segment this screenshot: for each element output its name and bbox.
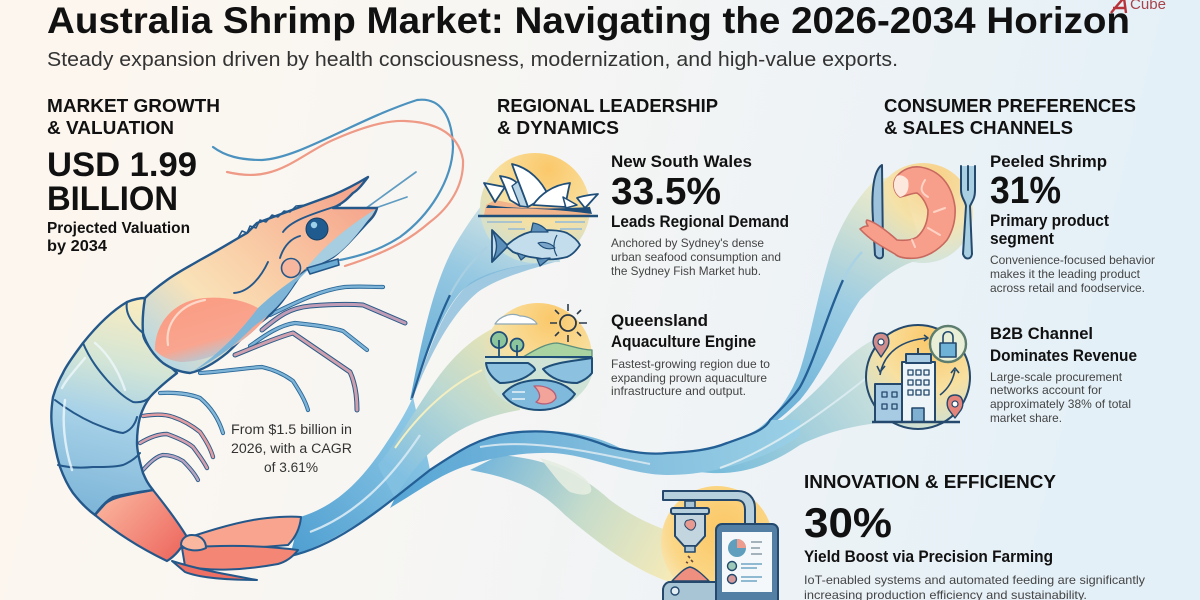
block: innovation: 30%	[804, 499, 892, 546]
shrimp illustration	[51, 100, 463, 580]
flowing ribbons	[290, 165, 925, 585]
stat label: by 2034	[47, 238, 107, 255]
stat label	[47, 220, 190, 255]
block: peeled shrimp: Convenience-focused behavior	[990, 253, 1155, 267]
carapace	[143, 177, 377, 373]
CAGR note: From $1.5 billion in	[231, 422, 352, 437]
icon: automated feeder and tablet	[661, 486, 778, 600]
block: New South Wales: Leads Regional Demand	[611, 212, 789, 231]
eye	[306, 218, 328, 240]
rostrum teeth	[238, 205, 306, 238]
heading: market growth	[47, 96, 220, 138]
carapace blob	[155, 298, 268, 362]
panel: market growth	[47, 96, 352, 475]
block: peeled shrimp: makes it the leading product	[990, 267, 1141, 281]
heading: regional: REGIONAL LEADERSHIP	[497, 96, 718, 116]
icon: B2B building network	[866, 325, 970, 429]
tail segment	[95, 490, 187, 561]
stat: valuation	[47, 146, 197, 218]
abdomen	[51, 298, 177, 515]
block: B2B: B2B Channel	[990, 324, 1093, 343]
tail fan	[178, 517, 301, 552]
heading: regional	[497, 96, 718, 138]
heading: market growth: MARKET GROWTH	[47, 96, 220, 116]
block: New South Wales: Anchored by Sydney's dense	[611, 236, 764, 250]
block: Queensland: Queensland	[611, 311, 708, 330]
panel: innovation	[661, 472, 1145, 600]
block: B2B: Large-scale procurement	[990, 370, 1123, 384]
block: Queensland: expanding prown aquaculture	[611, 371, 767, 385]
stat label: Projected Valuation	[47, 220, 190, 237]
CAGR note	[231, 422, 352, 475]
block: innovation: Yield Boost via Precision Farming	[804, 547, 1053, 566]
CAGR note: of 3.61%	[264, 460, 318, 475]
heading: market growth: & VALUATION	[47, 118, 174, 138]
carapace blue underside	[192, 268, 310, 372]
block: peeled shrimp: across retail and foodservice.	[990, 281, 1145, 295]
block: New South Wales: the Sydney Fish Market hub.	[611, 264, 761, 278]
block: Queensland	[611, 311, 770, 398]
block: B2B: Dominates Revenue	[990, 346, 1137, 365]
block: New South Wales	[611, 152, 789, 278]
block: New South Wales: urban seafood consumption and	[611, 250, 781, 264]
walking legs	[140, 287, 405, 480]
stat: valuation: BILLION	[47, 180, 178, 218]
icon: peeled shrimp with cutlery	[860, 163, 975, 263]
block: Queensland: infrastructure and output.	[611, 384, 746, 398]
block: peeled shrimp: 31%	[990, 170, 1061, 212]
block: innovation: INNOVATION & EFFICIENCY	[804, 472, 1056, 492]
heading: regional: & DYNAMICS	[497, 118, 619, 138]
heading: consumer: CONSUMER PREFERENCES	[884, 96, 1136, 116]
block: B2B: networks account for	[990, 383, 1102, 397]
block: peeled shrimp: segment	[990, 229, 1054, 248]
subtitle: Steady expansion driven by health consciousness, modernization, and high-value exports.	[47, 49, 898, 71]
heading: consumer	[884, 96, 1136, 138]
abdomen segment lines	[55, 302, 150, 468]
block: B2B: approximately 38% of total	[990, 397, 1131, 411]
block: B2B	[990, 324, 1137, 425]
block: Queensland: Fastest-growing region due to	[611, 357, 770, 371]
icon: Queensland aquaculture	[484, 303, 592, 411]
block: Queensland: Aquaculture Engine	[611, 332, 756, 351]
antennae	[213, 100, 463, 266]
stat: valuation: USD 1.99	[47, 146, 197, 184]
rostrum blue underside	[305, 209, 376, 270]
block: innovation	[804, 472, 1145, 600]
block: innovation: IoT-enabled systems and automated feeding are significantly	[804, 573, 1145, 587]
CAGR note: 2026, with a CAGR	[231, 441, 352, 456]
block: peeled shrimp: Peeled Shrimp	[990, 152, 1107, 171]
heading: consumer: & SALES CHANNELS	[884, 118, 1073, 138]
block: New South Wales: New South Wales	[611, 152, 752, 171]
panel: consumer preferences	[860, 96, 1155, 429]
block: peeled shrimp	[990, 152, 1155, 295]
panel: regional leadership	[478, 96, 789, 411]
block: New South Wales: 33.5%	[611, 171, 721, 213]
icon: Sydney opera house and fish	[478, 153, 598, 266]
title: Australia Shrimp Market: Navigating the 2026-2034 Horizon	[47, 0, 1130, 41]
logo	[1111, 0, 1166, 13]
block: B2B: market share.	[990, 411, 1062, 425]
block: peeled shrimp: Primary product	[990, 211, 1109, 230]
